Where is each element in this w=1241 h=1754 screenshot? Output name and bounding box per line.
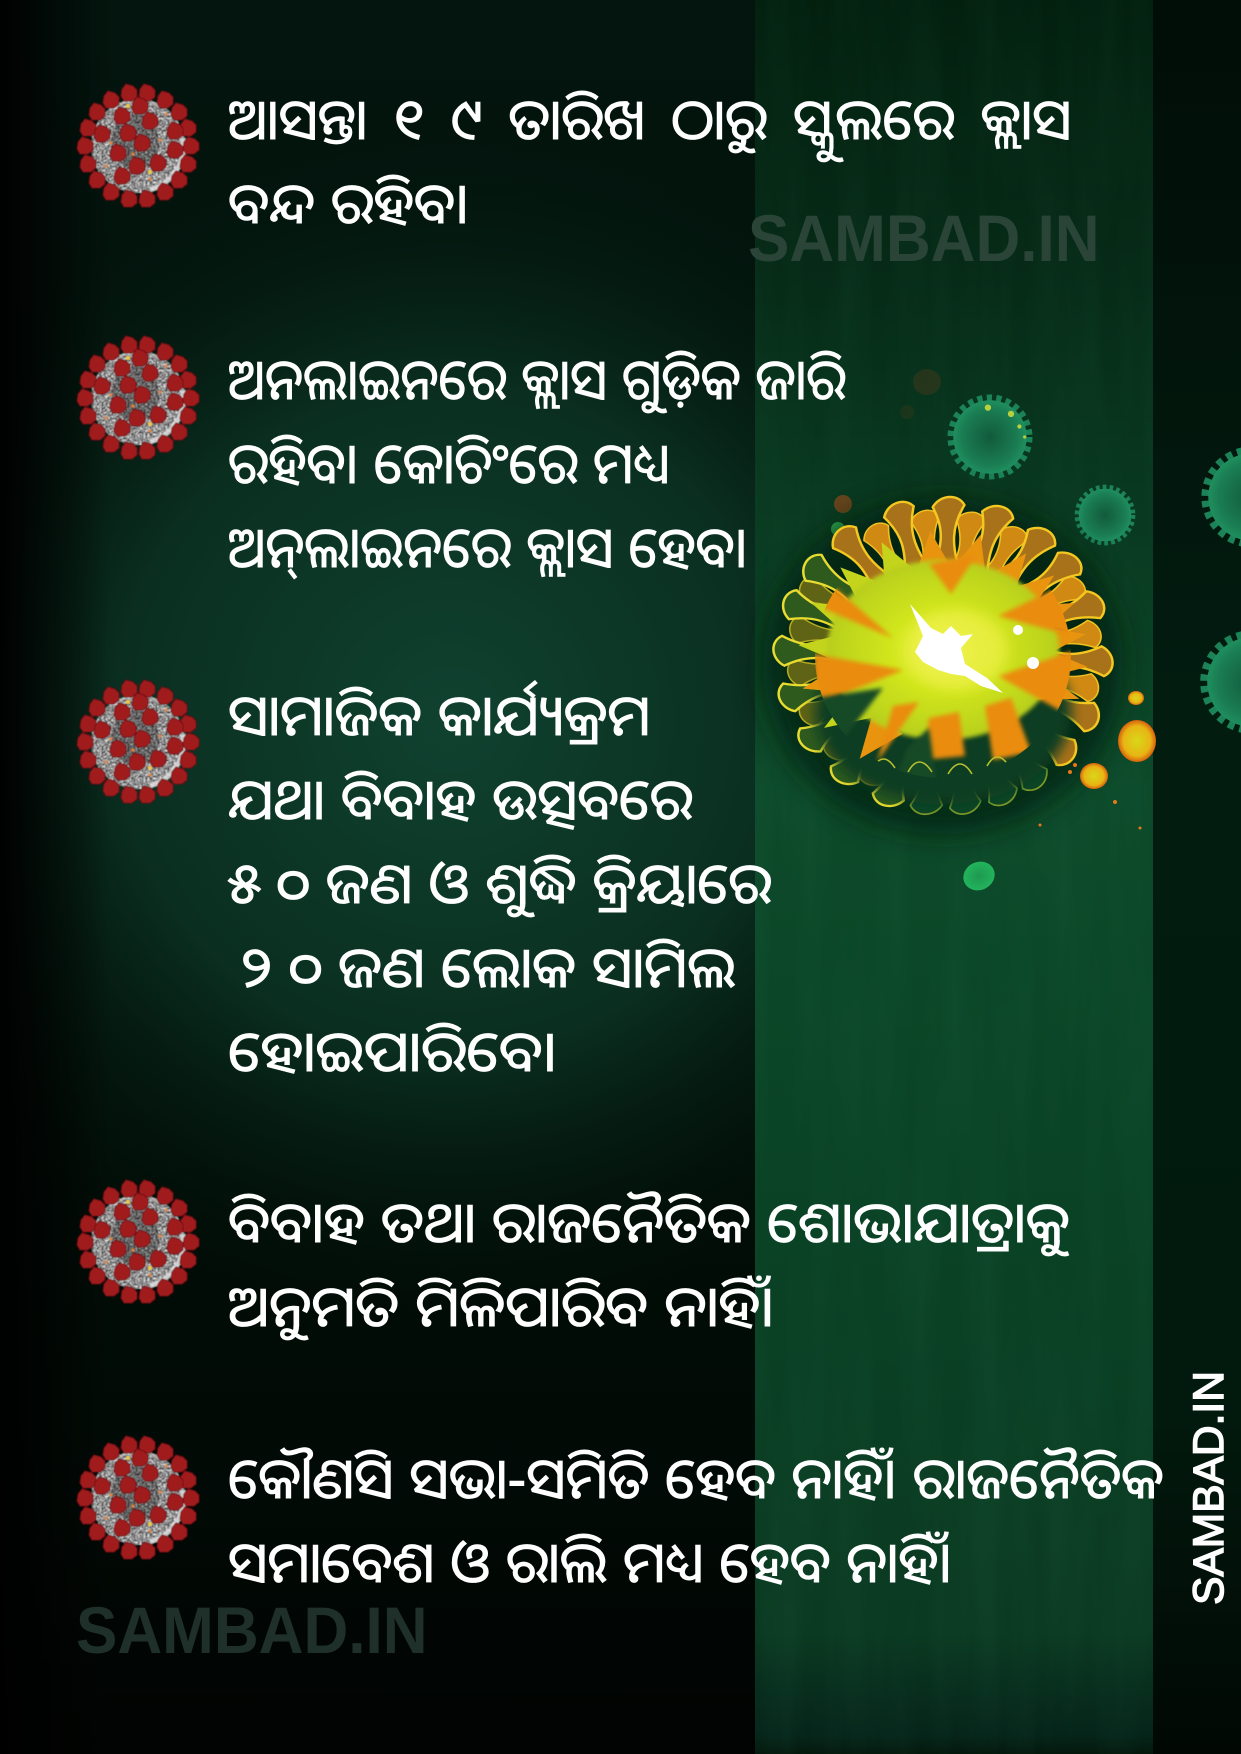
text block: no meetings or rallies: [228, 1447, 1164, 1594]
icon: small green virus top: [951, 398, 1029, 476]
text block: online classes: [228, 348, 846, 580]
vertical watermark: SAMBAD.IN: [1186, 1371, 1233, 1605]
text block: processions not permitted: [228, 1191, 1070, 1340]
green droplet: [959, 857, 999, 895]
icon: virus bullet 3: [77, 680, 199, 803]
text block: processions not permitted: ବିବାହ ତଥା ରାଜନୈତିକ ଶୋଭାଯାତ୍ରାକୁ: [228, 1191, 1070, 1254]
icon: virus bullet 4: [77, 1180, 199, 1303]
watermark top: SAMBAD.IN: [748, 201, 1100, 275]
text block: schools closed: [228, 88, 1072, 235]
icon: virus bullet 1: [77, 84, 199, 207]
watermark bottom: SAMBAD.IN: [76, 1593, 428, 1667]
orange glowing droplets: [1038, 691, 1156, 830]
text block: social events limits: ଯଥା ବିବାହ ଉତ୍ସବରେ: [228, 768, 693, 831]
text block: schools closed: ଆସନ୍ତା ୧ ୯ ତାରିଖ ଠାରୁ ସ୍କୁଲରେ କ୍ଲାସ: [228, 88, 1072, 151]
text block: no meetings or rallies: କୌଣସି ସଭା-ସମିତି ହେବ ନାହିଁ। ରାଜନୈତିକ: [228, 1447, 1164, 1510]
text block: social events limits: ୫ ୦ ଜଣ ଓ ଶୁଦ୍ଧି କ୍ରିୟାରେ: [228, 852, 772, 915]
faint brown spots: [831, 369, 941, 536]
illustration: large glowing virus: [763, 496, 1123, 834]
icon: green virus at right edge lower: [1205, 635, 1241, 729]
text block: social events limits: [227, 680, 772, 1083]
text block: no meetings or rallies: ସମାବେଶ ଓ ରାଲି ମଧ୍ୟ ହେବ ନାହିଁ।: [228, 1531, 952, 1594]
icon: virus bullet 5: [77, 1436, 199, 1559]
icon: small green virus middle: [1077, 487, 1133, 543]
text block: social events limits: ହୋଇପାରିବେ।: [228, 1020, 558, 1083]
icon: virus bullet 2: [77, 336, 199, 459]
icon: green virus at right edge upper: [1206, 451, 1241, 543]
text block: online classes: ରହିବ। କୋଚିଂରେ ମଧ୍ୟ: [228, 432, 670, 495]
text block: processions not permitted: ଅନୁମତି ମିଳିପାରିବ ନାହିଁ।: [228, 1275, 775, 1338]
text block: social events limits: ୨ ୦ ଜଣ ଲୋକ ସାମିଲ: [240, 936, 736, 999]
text block: schools closed: ବନ୍ଦ ରହିବ।: [228, 172, 469, 235]
text block: social events limits: ସାମାଜିକ କାର୍ଯ୍ୟକ୍ରମ: [228, 684, 650, 747]
text block: online classes: ଅନଲାଇନରେ କ୍ଲାସ ଗୁଡ଼ିକ ଜାରି: [228, 348, 846, 411]
text block: online classes: ଅନ୍‌ଲାଇନରେ କ୍ଲାସ ହେବ।: [228, 516, 748, 579]
